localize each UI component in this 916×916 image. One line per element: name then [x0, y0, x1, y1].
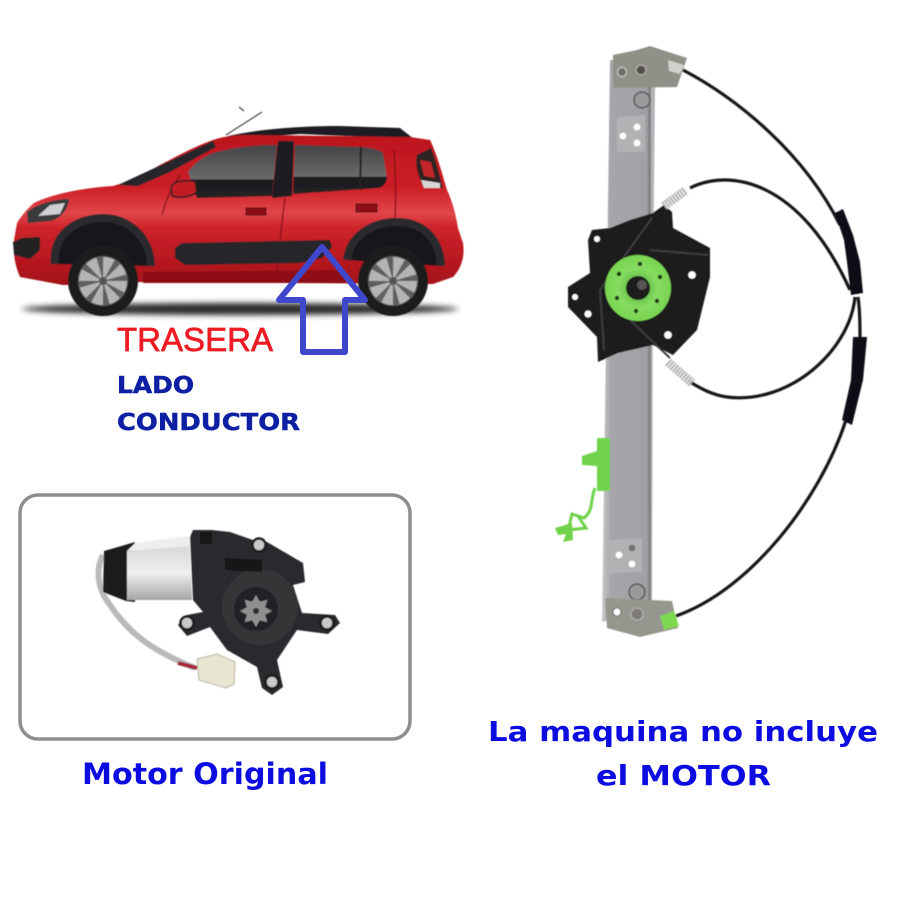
label: LADO CONDUCTOR [117, 373, 300, 436]
regulator green clip and strap [555, 438, 610, 542]
caption: La maquina no incluye el MOTOR [488, 715, 878, 792]
motor can top [127, 536, 192, 551]
motor gearbox housing [178, 530, 340, 695]
car antenna [226, 107, 262, 135]
car rear wheel [358, 246, 428, 316]
motor gear cover disc [222, 569, 298, 645]
photo: window motor [99, 530, 340, 695]
regulator cables [676, 70, 860, 616]
regulator wheel holes [615, 262, 662, 313]
regulator plate channels [600, 218, 708, 358]
caption: La maquina no incluye el MOTOR: el MOTOR [596, 759, 771, 792]
motor mounting lugs [180, 538, 334, 688]
label: LADO CONDUCTOR: CONDUCTOR [117, 410, 300, 436]
regulator plate mounting holes [572, 236, 696, 339]
label: LADO CONDUCTOR: LADO [117, 373, 194, 399]
car body [14, 135, 464, 285]
car rear window [293, 145, 387, 194]
caption: La maquina no incluye el MOTOR: La maquina no incluye [488, 715, 878, 748]
panel: motor photo frame [20, 495, 410, 739]
car front window [188, 145, 277, 198]
regulator cable springs [664, 190, 692, 383]
car rear wheel arch [347, 222, 441, 266]
caption: Motor Original: Motor Original [82, 757, 328, 791]
car headlight [27, 199, 69, 223]
label: TRASERA: TRASERA [117, 321, 273, 358]
car front wheel [68, 246, 138, 316]
car mirror [171, 181, 197, 197]
arrow pointing to rear door [279, 247, 365, 352]
motor can [127, 546, 192, 600]
motor pinion gear [240, 595, 272, 627]
car sill [143, 270, 345, 283]
motor connector [197, 654, 235, 688]
car door pillar [272, 141, 294, 198]
photo: red car side view [13, 107, 464, 316]
regulator cable sleeves [835, 209, 867, 425]
motor red wires [178, 663, 197, 668]
car front wheel arch [55, 218, 151, 266]
car side molding [175, 240, 332, 265]
photo: window regulator [555, 46, 867, 637]
regulator black mechanism plate [568, 205, 710, 362]
regulator green drive wheel [605, 255, 671, 321]
car tail light [416, 148, 443, 188]
regulator bottom bracket [605, 538, 679, 637]
regulator rail [602, 60, 655, 622]
car windshield [118, 141, 216, 186]
car front grille [13, 237, 40, 259]
car window divider [360, 147, 361, 190]
car door handles [246, 204, 377, 215]
car door seams [162, 150, 396, 270]
regulator top bracket [613, 46, 687, 152]
car roof rail [228, 126, 414, 139]
motor housing shading [200, 532, 262, 572]
car ground shadow [22, 303, 458, 315]
motor cable [99, 555, 195, 668]
motor end cap [103, 542, 135, 602]
